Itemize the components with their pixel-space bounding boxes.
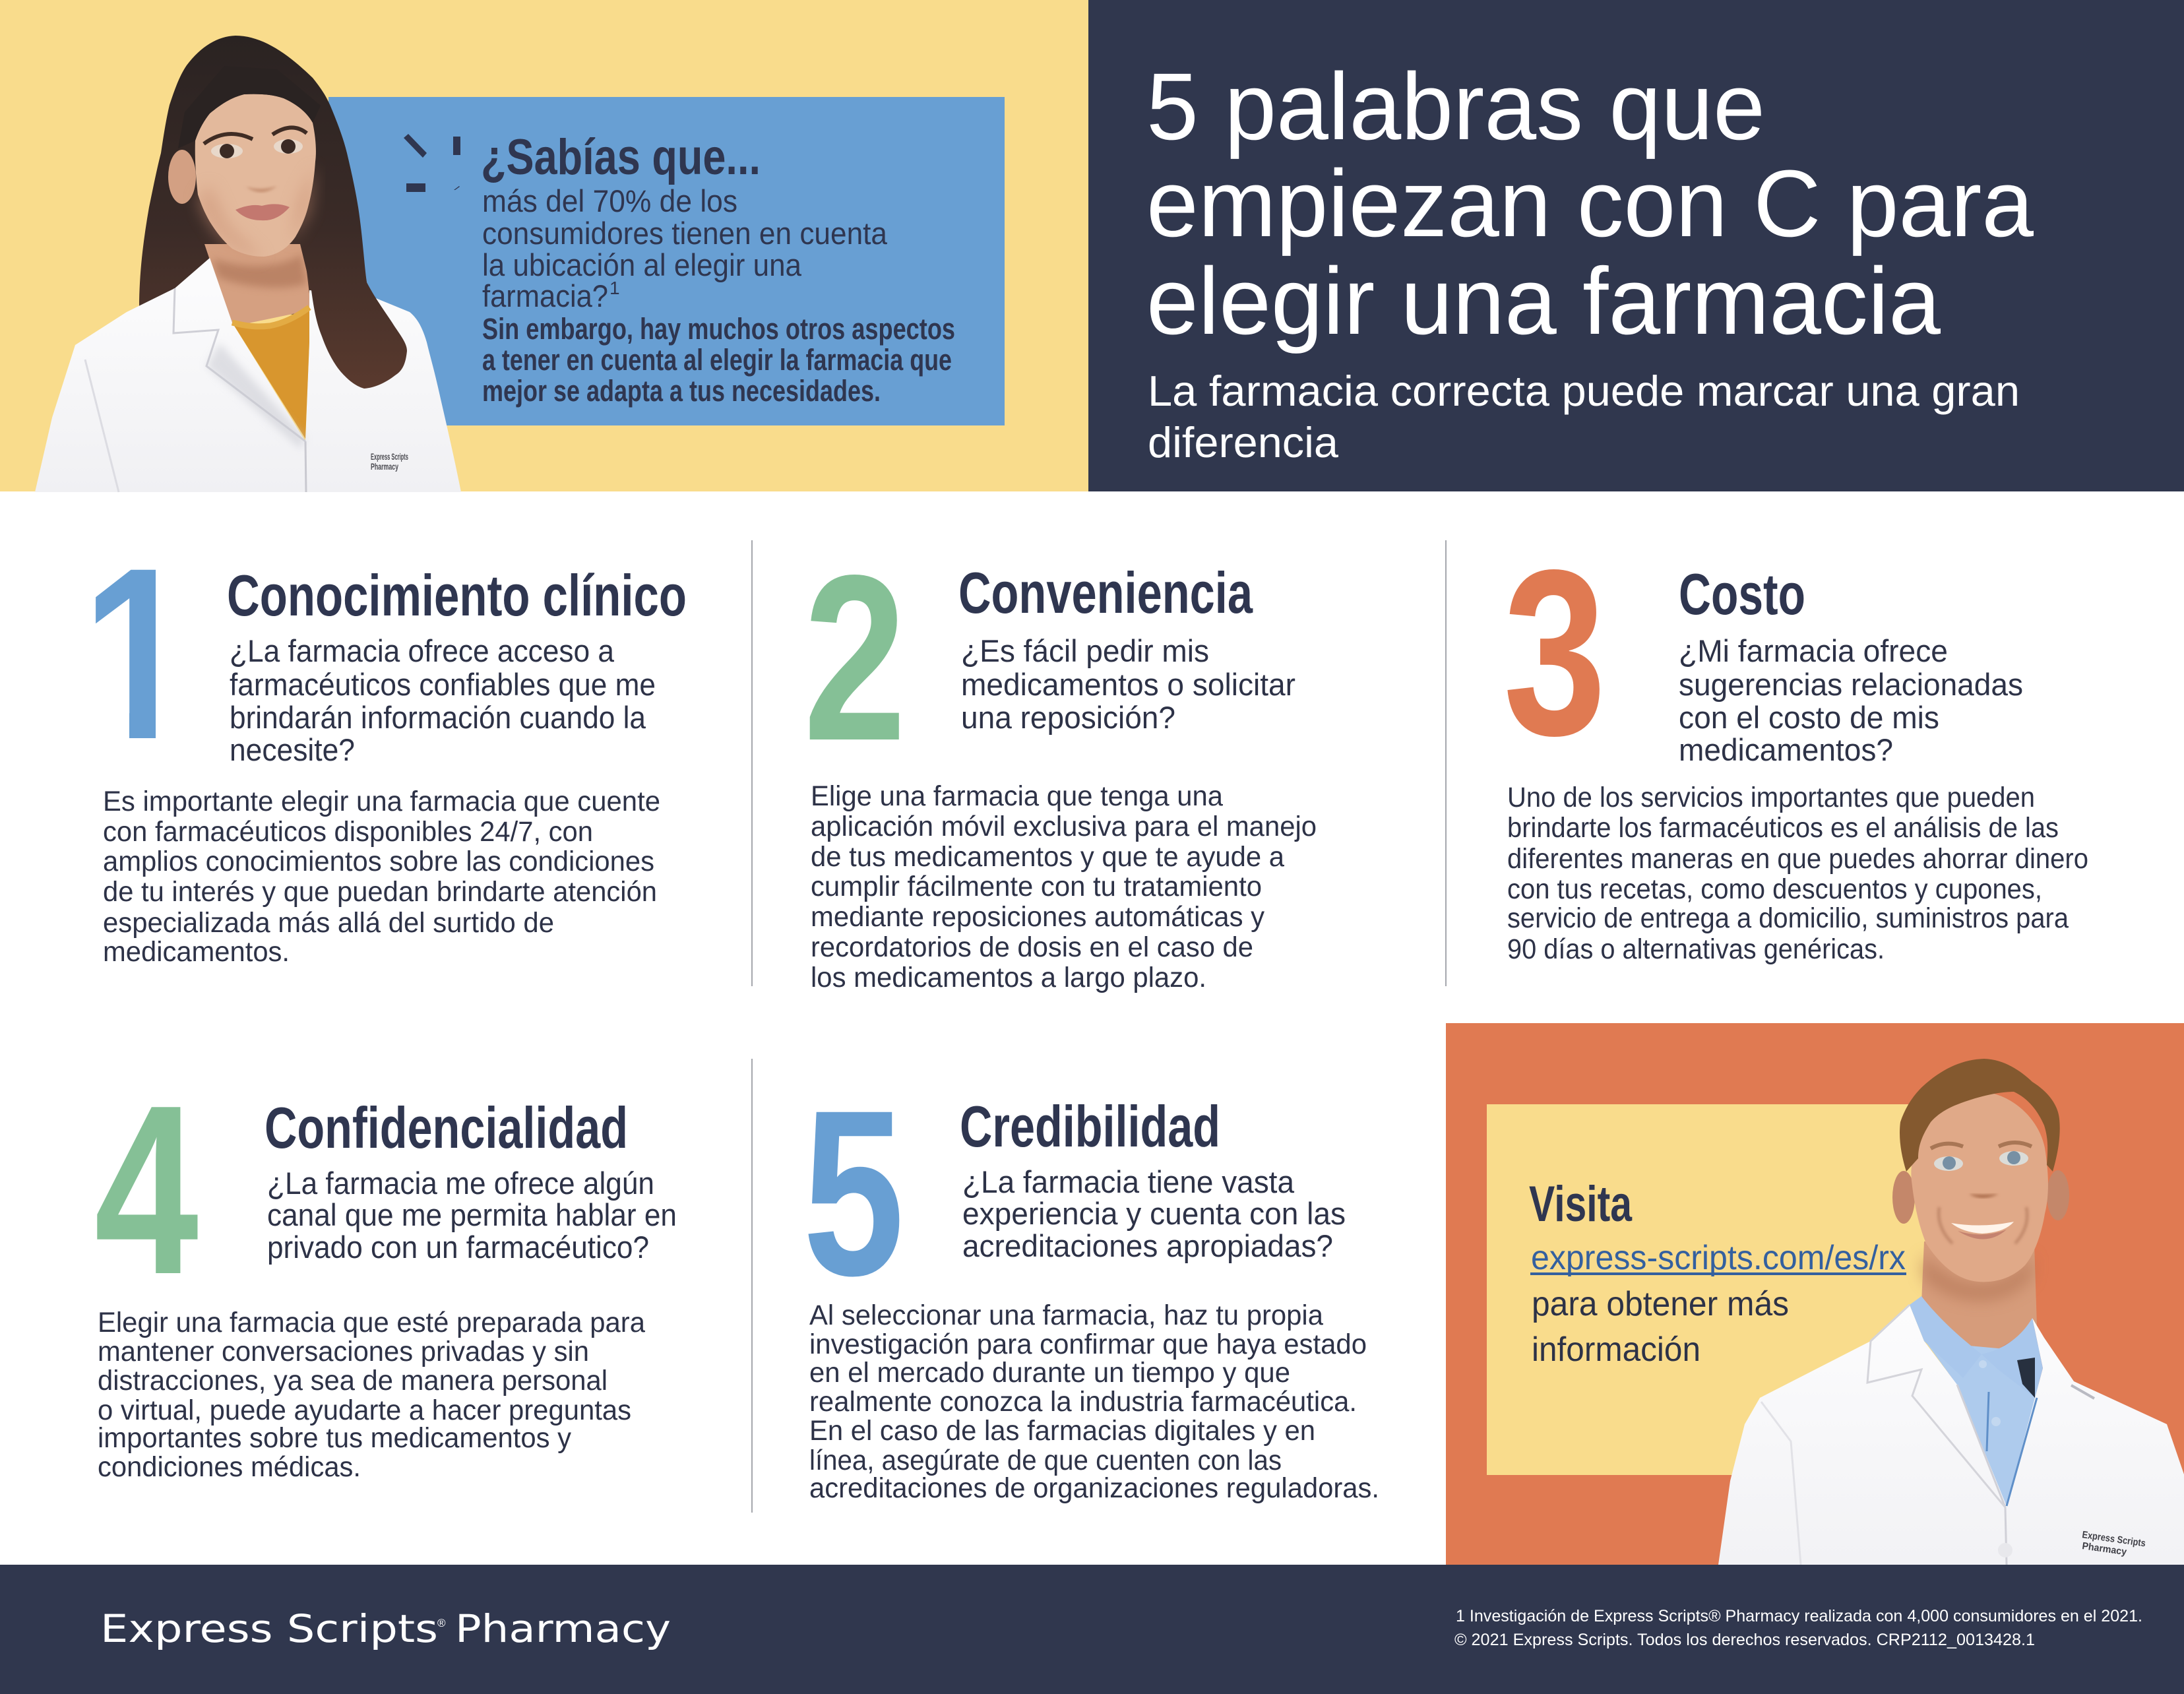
footnote: © 2021 Express Scripts. Todos los derechos reservados. CRP2112_0013428.1 — [1454, 1631, 2035, 1649]
coat — [1718, 1305, 2184, 1565]
body text: o virtual, puede ayudarte a hacer preguntas — [98, 1395, 631, 1426]
panel: 1 clinical knowledge — [59, 517, 687, 968]
body text: Es importante elegir una farmacia que cuente — [103, 786, 660, 817]
icon: glitchy exclamation marks — [404, 134, 460, 192]
body text: con farmacéuticos disponibles 24/7, con — [103, 816, 593, 848]
title: empiezan con C para — [1146, 150, 2034, 257]
question: acreditaciones apropiadas? — [962, 1228, 1333, 1263]
body text: 90 días o alternativas genéricas. — [1507, 933, 1885, 965]
lapel edges — [1867, 1305, 2005, 1507]
body text: distracciones, ya sea de manera personal — [98, 1365, 608, 1396]
body text: investigación para confirmar que haya estado — [809, 1329, 1367, 1360]
coat — [35, 258, 461, 492]
placket lines — [1987, 1392, 2037, 1506]
body text: servicio de entrega a domicilio, suministros para — [1507, 902, 2069, 934]
callout text: Sin embargo, hay muchos otros aspectos — [482, 312, 955, 346]
ears — [1892, 1171, 1915, 1224]
body text: Elegir una farmacia que esté preparada para — [98, 1307, 645, 1338]
cta link: express-scripts.com/es/rx — [1531, 1239, 1906, 1277]
question — [230, 633, 656, 767]
neck — [204, 244, 311, 327]
hair right strand — [300, 218, 407, 389]
heading: Credibilidad — [960, 1094, 1220, 1159]
question: con el costo de mis — [1679, 700, 1939, 735]
body text: diferentes maneras en que puedes ahorrar dinero — [1507, 843, 2088, 875]
body text: mantener conversaciones privadas y sin — [98, 1336, 589, 1367]
coat logo text: Pharmacy — [371, 461, 398, 472]
body text: recordatorios de dosis en el caso de — [811, 931, 1253, 963]
body text: amplios conocimientos sobre las condiciones — [103, 846, 654, 877]
body text: con tus recetas, como descuentos y cupones, — [1507, 873, 2042, 905]
cta text — [1532, 1285, 1789, 1369]
footnote: 1 Investigación de Express Scripts® Pharmacy realizada con 4,000 consumidores en el 2021. — [1456, 1607, 2142, 1625]
body text: medicamentos. — [103, 936, 290, 968]
body text: mediante reposiciones automáticas y — [811, 901, 1264, 933]
body text: línea, asegúrate de que cuenten con las — [809, 1445, 1282, 1476]
coat logo text — [371, 451, 408, 472]
face — [1911, 1092, 2048, 1282]
question: privado con un farmacéutico? — [267, 1230, 649, 1265]
body text: aplicación móvil exclusiva para el manejo — [811, 811, 1317, 842]
lapel edges — [173, 288, 305, 441]
panel: 2 convenience — [803, 526, 1317, 993]
body text: brindarte los farmacéuticos es el análisis de las — [1507, 812, 2059, 844]
subtitle: diferencia — [1148, 418, 1339, 466]
heading: Conveniencia — [958, 560, 1253, 625]
body text: de tus medicamentos y que te ayude a — [811, 841, 1284, 873]
footnote — [1454, 1607, 2142, 1649]
question: ¿Es fácil pedir mis — [961, 633, 1209, 668]
body text — [103, 786, 660, 968]
body text: Elige una farmacia que tenga una — [811, 780, 1223, 812]
facial features — [1931, 1143, 2032, 1243]
panel: 4 confidentiality — [94, 1055, 677, 1483]
logo: ® — [437, 1617, 446, 1629]
body text: condiciones médicas. — [98, 1451, 361, 1483]
callout text: mejor se adapta a tus necesidades. — [482, 374, 881, 408]
number 4: 4 — [94, 1055, 200, 1325]
body text: en el mercado durante un tiempo y que — [809, 1357, 1290, 1389]
neck shadow — [1923, 1253, 2033, 1300]
callout text: 1 — [609, 278, 620, 298]
number 1: 1 — [82, 517, 195, 790]
cta heading: Visita — [1529, 1176, 1633, 1232]
facial features — [204, 127, 307, 220]
panel: visit call to action — [1446, 1023, 2184, 1565]
neck shadow — [212, 254, 307, 288]
logo: Express Scripts — [100, 1606, 438, 1651]
heading: Costo — [1679, 561, 1805, 627]
body text: acreditaciones de organizaciones reguladoras. — [809, 1472, 1379, 1504]
panel: header yellow background — [0, 0, 1088, 491]
number 5: 5 — [803, 1061, 904, 1325]
ear — [168, 150, 196, 204]
sweater — [232, 307, 309, 439]
question: brindarán información cuando la — [230, 700, 646, 735]
question: ¿La farmacia tiene vasta — [962, 1164, 1295, 1199]
neck — [1921, 1241, 2037, 1359]
footer bar — [0, 1565, 2184, 1694]
question: ¿La farmacia me ofrece algún — [267, 1166, 654, 1201]
cta text: información — [1532, 1331, 1700, 1369]
subtitle — [1148, 367, 2020, 466]
question: ¿Mi farmacia ofrece — [1679, 633, 1948, 668]
question — [1679, 633, 2023, 767]
panel: 3 cost — [1503, 520, 2088, 965]
callout: did you know — [328, 97, 1005, 425]
shirt collar shadow — [2017, 1358, 2035, 1398]
body text — [1507, 782, 2088, 965]
title: 5 palabras que — [1146, 53, 1765, 160]
coat logo text: Express Scripts — [371, 451, 408, 462]
sweater neckline shade — [232, 307, 309, 327]
heading: Conocimiento clínico — [227, 563, 687, 628]
question: medicamentos? — [1679, 732, 1893, 767]
body text: Al seleccionar una farmacia, haz tu propia — [809, 1300, 1323, 1331]
logo — [100, 1606, 671, 1651]
logo: Pharmacy — [455, 1606, 671, 1651]
number 2: 2 — [803, 526, 906, 790]
callout text: farmacia? — [482, 278, 608, 313]
callout text: consumidores tienen en cuenta — [482, 216, 888, 251]
callout heading: ¿Sabías que... — [481, 129, 761, 185]
callout text: más del 70% de los — [482, 183, 737, 218]
number 3: 3 — [1503, 520, 1606, 784]
hair — [1900, 1059, 2060, 1172]
question: medicamentos o solicitar — [961, 667, 1295, 702]
callout text: la ubicación al elegir una — [482, 247, 802, 282]
question — [961, 633, 1295, 735]
body text — [811, 780, 1317, 993]
body text: importantes sobre tus medicamentos y — [98, 1422, 571, 1454]
hair over forehead — [178, 66, 321, 148]
title: elegir una farmacia — [1146, 248, 1941, 354]
callout text: a tener en cuenta al elegir la farmacia que — [482, 343, 952, 377]
cta text: para obtener más — [1532, 1285, 1789, 1323]
question: sugerencias relacionadas — [1679, 667, 2023, 702]
question — [267, 1166, 677, 1265]
question: canal que me permita hablar en — [267, 1197, 677, 1232]
shirt collar — [1910, 1296, 1981, 1378]
question: ¿La farmacia ofrece acceso a — [230, 633, 615, 668]
face shading — [198, 185, 264, 259]
question — [962, 1164, 1346, 1263]
body text — [98, 1307, 645, 1483]
question: una reposición? — [961, 700, 1175, 735]
question: experiencia y cuenta con las — [962, 1196, 1346, 1231]
hair back — [139, 36, 369, 317]
body text: de tu interés y que puedan brindarte atención — [103, 876, 657, 908]
callout text — [482, 183, 955, 408]
panel: 5 credibility — [803, 1061, 1379, 1504]
body text: los medicamentos a largo plazo. — [811, 962, 1206, 993]
subtitle: La farmacia correcta puede marcar una gran — [1148, 367, 2020, 415]
heading: Confidencialidad — [265, 1095, 628, 1160]
panel: header navy background — [1088, 0, 2184, 491]
body text: Uno de los servicios importantes que pueden — [1507, 782, 2035, 813]
body text: especializada más allá del surtido de — [103, 907, 554, 939]
photo: female pharmacist — [35, 36, 461, 492]
body text: En el caso de las farmacias digitales y en — [809, 1415, 1315, 1447]
shirt body — [1926, 1342, 2040, 1512]
coat logo text — [2081, 1529, 2146, 1558]
face — [195, 94, 316, 257]
body text: realmente conozca la industria farmacéutica. — [809, 1386, 1357, 1418]
question: necesite? — [230, 732, 355, 767]
coat logo text: Pharmacy — [2081, 1540, 2128, 1558]
body text — [809, 1300, 1379, 1504]
photo: male pharmacist — [1718, 1059, 2184, 1565]
body text: cumplir fácilmente con tu tratamiento — [811, 871, 1262, 902]
title — [1146, 53, 2034, 354]
coat logo text: Express Scripts — [2081, 1529, 2146, 1549]
question: farmacéuticos confiables que me — [230, 667, 656, 702]
